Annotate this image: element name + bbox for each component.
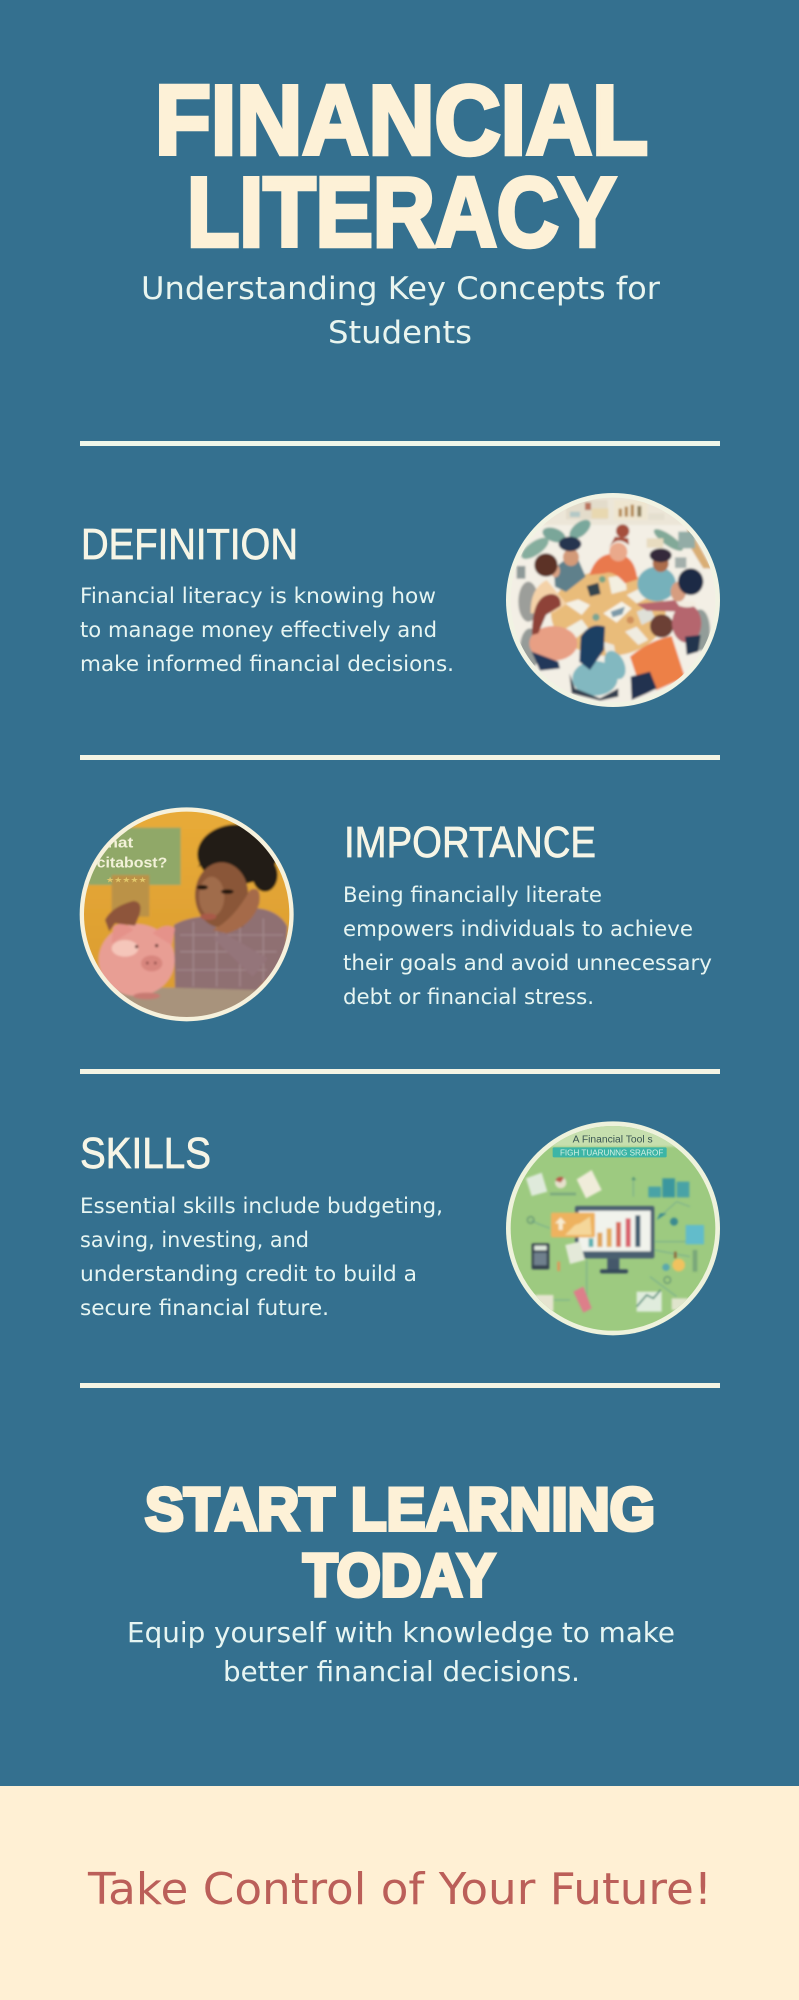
stacks <box>648 1187 661 1197</box>
text block: definition: Financial literacy is knowing how <box>80 584 436 608</box>
title: LITERACY <box>187 157 616 267</box>
card <box>551 1213 595 1237</box>
hand on cheek <box>213 889 260 933</box>
footer slogan: Take Control of Your Future! <box>87 1864 712 1915</box>
sign text: citabost? <box>97 856 167 872</box>
coin <box>672 1259 685 1271</box>
text block: definition <box>80 584 454 676</box>
text block: call to action <box>127 1616 675 1688</box>
text block: importance: Being financially literate <box>343 883 602 907</box>
documents <box>526 1173 547 1196</box>
icon: financial tools dashboard: FIGH TUARUNNG SRAROF <box>560 1148 663 1157</box>
monitor <box>575 1206 654 1258</box>
icon: financial tools dashboard: A Financial Tool s <box>573 1135 653 1146</box>
text block: importance <box>343 883 712 1009</box>
piggy bank <box>99 924 175 996</box>
person: blue-grey left <box>554 557 586 592</box>
person: pink far right <box>672 604 701 643</box>
person: pink left <box>529 626 577 661</box>
footer band <box>0 1786 799 2000</box>
subtitle <box>141 271 660 351</box>
text block: importance: their goals and avoid unnecessary <box>343 951 712 975</box>
heading: start learning today <box>145 1476 655 1609</box>
panel: importance <box>80 807 712 1022</box>
boy hair <box>197 824 277 884</box>
heading: start learning today: TODAY <box>303 1542 495 1609</box>
table <box>551 571 666 656</box>
text block: skills <box>80 1194 443 1320</box>
text block: skills: understanding credit to build a <box>80 1262 417 1286</box>
calculator <box>532 1243 549 1269</box>
boy shirt <box>174 908 287 990</box>
heading: skills: SKILLS <box>80 1129 211 1178</box>
heading: start learning today: START LEARNING <box>145 1476 655 1543</box>
panel: skills <box>81 1121 720 1336</box>
text block: skills: secure financial future. <box>80 1296 329 1320</box>
building <box>686 1225 704 1244</box>
icon: financial tools dashboard <box>506 1121 720 1336</box>
person: cream left <box>531 580 567 613</box>
bars <box>589 1238 593 1247</box>
panel: definition <box>80 493 720 707</box>
text block: skills: Essential skills include budgeting, <box>80 1194 443 1218</box>
subtitle: Students <box>328 315 472 351</box>
sign text: ★★★★★ <box>106 875 147 884</box>
header <box>141 65 660 351</box>
icon: child with piggy bank <box>80 807 294 1022</box>
title: FINANCIAL <box>155 65 648 175</box>
text block: call to action: Equip yourself with knowledge to make <box>127 1616 675 1649</box>
text block: call to action: better financial decisions. <box>223 1655 580 1688</box>
person: teal bottom <box>572 661 618 696</box>
coin hand <box>105 901 140 932</box>
chairs <box>518 582 538 622</box>
heading: definition: DEFINITION <box>81 520 298 569</box>
text block: definition: to manage money effectively and <box>80 618 437 642</box>
boy head <box>195 862 248 928</box>
pink tag <box>573 1287 592 1313</box>
icon: students around a table <box>506 493 720 707</box>
text block: skills: saving, investing, and <box>80 1228 309 1252</box>
sign text <box>97 836 167 884</box>
panel: call to action <box>127 1476 675 1688</box>
papers <box>565 599 590 615</box>
boy neck <box>220 908 243 927</box>
title <box>155 65 648 267</box>
subtitle: Understanding Key Concepts for <box>141 271 660 307</box>
lines <box>530 1178 690 1310</box>
text block: importance: empowers individuals to achieve <box>343 917 693 941</box>
bottom chart <box>637 1292 662 1312</box>
person: top woman <box>589 554 637 583</box>
person: teal right <box>637 567 676 601</box>
heading: importance: IMPORTANCE <box>344 818 596 867</box>
sign text: hat <box>107 836 133 852</box>
text block: definition: make informed financial decisions. <box>80 652 454 676</box>
text block: importance: debt or financial stress. <box>343 985 594 1009</box>
person: orange bottom right <box>630 636 685 690</box>
